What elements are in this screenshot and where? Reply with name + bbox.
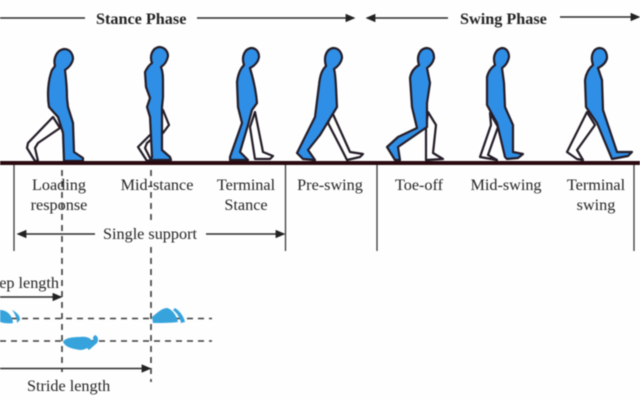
footprint: right bbox=[152, 308, 185, 323]
phase labels: Mid-swing bbox=[470, 176, 542, 194]
heading: stance phase: Stance Phase bbox=[96, 10, 186, 28]
figure: terminal stance bbox=[230, 48, 273, 160]
phase labels: Toe-off bbox=[395, 176, 444, 194]
phase labels: response bbox=[31, 196, 87, 214]
single support span: Single support bbox=[103, 225, 197, 243]
phase labels: Stance bbox=[224, 196, 268, 214]
figure: pre-swing bbox=[297, 48, 363, 160]
figure: loading response bbox=[27, 49, 83, 161]
phase labels bbox=[31, 176, 626, 214]
phase dividers bbox=[14, 165, 634, 251]
phase labels: Terminal bbox=[217, 176, 276, 194]
figure: mid-stance bbox=[138, 47, 171, 161]
figure: mid-swing bbox=[480, 48, 523, 160]
phase labels: Loading bbox=[32, 176, 86, 194]
heading: swing phase: Swing Phase bbox=[460, 10, 547, 28]
footprint: left edge bbox=[0, 310, 20, 323]
dashed horizontal guides bbox=[0, 318, 212, 341]
phase labels: swing bbox=[577, 196, 615, 214]
phase labels: Mid-stance bbox=[121, 176, 193, 194]
footprint: centre bbox=[63, 335, 98, 350]
phase labels: Pre-swing bbox=[297, 176, 363, 194]
stride length: Stride length bbox=[27, 377, 110, 395]
dashed vertical guides bbox=[62, 170, 151, 382]
figure: toe-off bbox=[387, 48, 443, 160]
phase labels: Terminal bbox=[567, 176, 626, 194]
figure: terminal swing bbox=[567, 48, 632, 160]
ground line bbox=[0, 161, 640, 165]
